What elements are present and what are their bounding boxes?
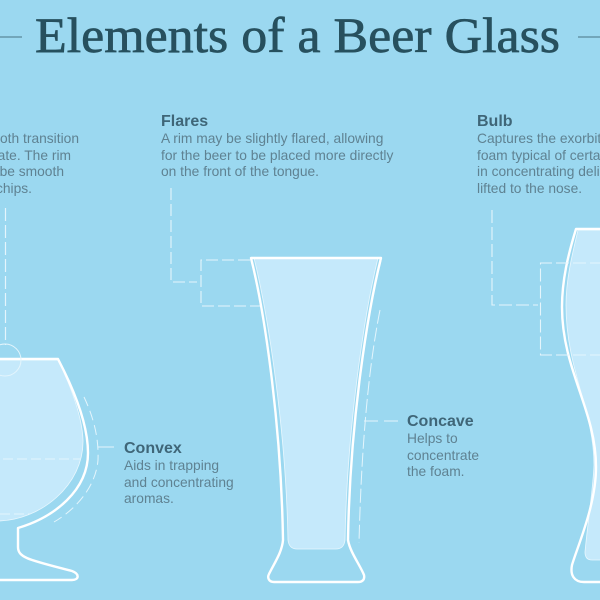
flares callout: [171, 188, 261, 306]
text block: concave: Concave: [407, 413, 474, 430]
pilsner outline: [251, 258, 381, 582]
snifter glass: [0, 359, 88, 580]
text block: convex: Aids in trapping: [124, 458, 219, 473]
text block: convex: [124, 440, 234, 506]
pilsner fill: [254, 258, 378, 549]
snifter max-width dashed line: [3, 458, 80, 460]
text block: flares: Flares: [161, 113, 208, 130]
text block: bulb: [477, 113, 600, 196]
text block: convex: aromas.: [124, 491, 174, 506]
text block: flares: A rim may be slightly flared, allowing: [161, 131, 383, 146]
bulb callout: [492, 210, 600, 355]
text block: convex: and concentrating: [124, 475, 234, 490]
pilsner glass: [251, 258, 381, 582]
text block: flares: for the beer to be placed more directly: [161, 148, 393, 163]
convex callout line: [54, 397, 114, 522]
bulb glass: [562, 229, 600, 582]
text block: concave: [407, 413, 479, 479]
snifter fill: [0, 360, 83, 521]
text block: rim: [0, 131, 79, 196]
text block: flares: [161, 113, 393, 179]
snifter rim callout: [0, 208, 21, 376]
text block: rim: be smooth: [0, 164, 64, 179]
concave callout line: [359, 310, 400, 543]
text block: concave: Helps to: [407, 431, 458, 446]
snifter outline: [0, 359, 88, 580]
text block: bulb: Bulb: [477, 113, 513, 130]
text block: concave: the foam.: [407, 464, 465, 479]
text block: convex: Convex: [124, 440, 182, 457]
bulb outline: [562, 229, 600, 582]
title: Elements of a Beer Glass: [35, 7, 560, 63]
bulb fill: [566, 230, 600, 560]
text block: bulb: lifted to the nose.: [477, 181, 582, 196]
text block: concave: concentrate: [407, 448, 479, 463]
text block: flares: on the front of the tongue.: [161, 164, 319, 179]
